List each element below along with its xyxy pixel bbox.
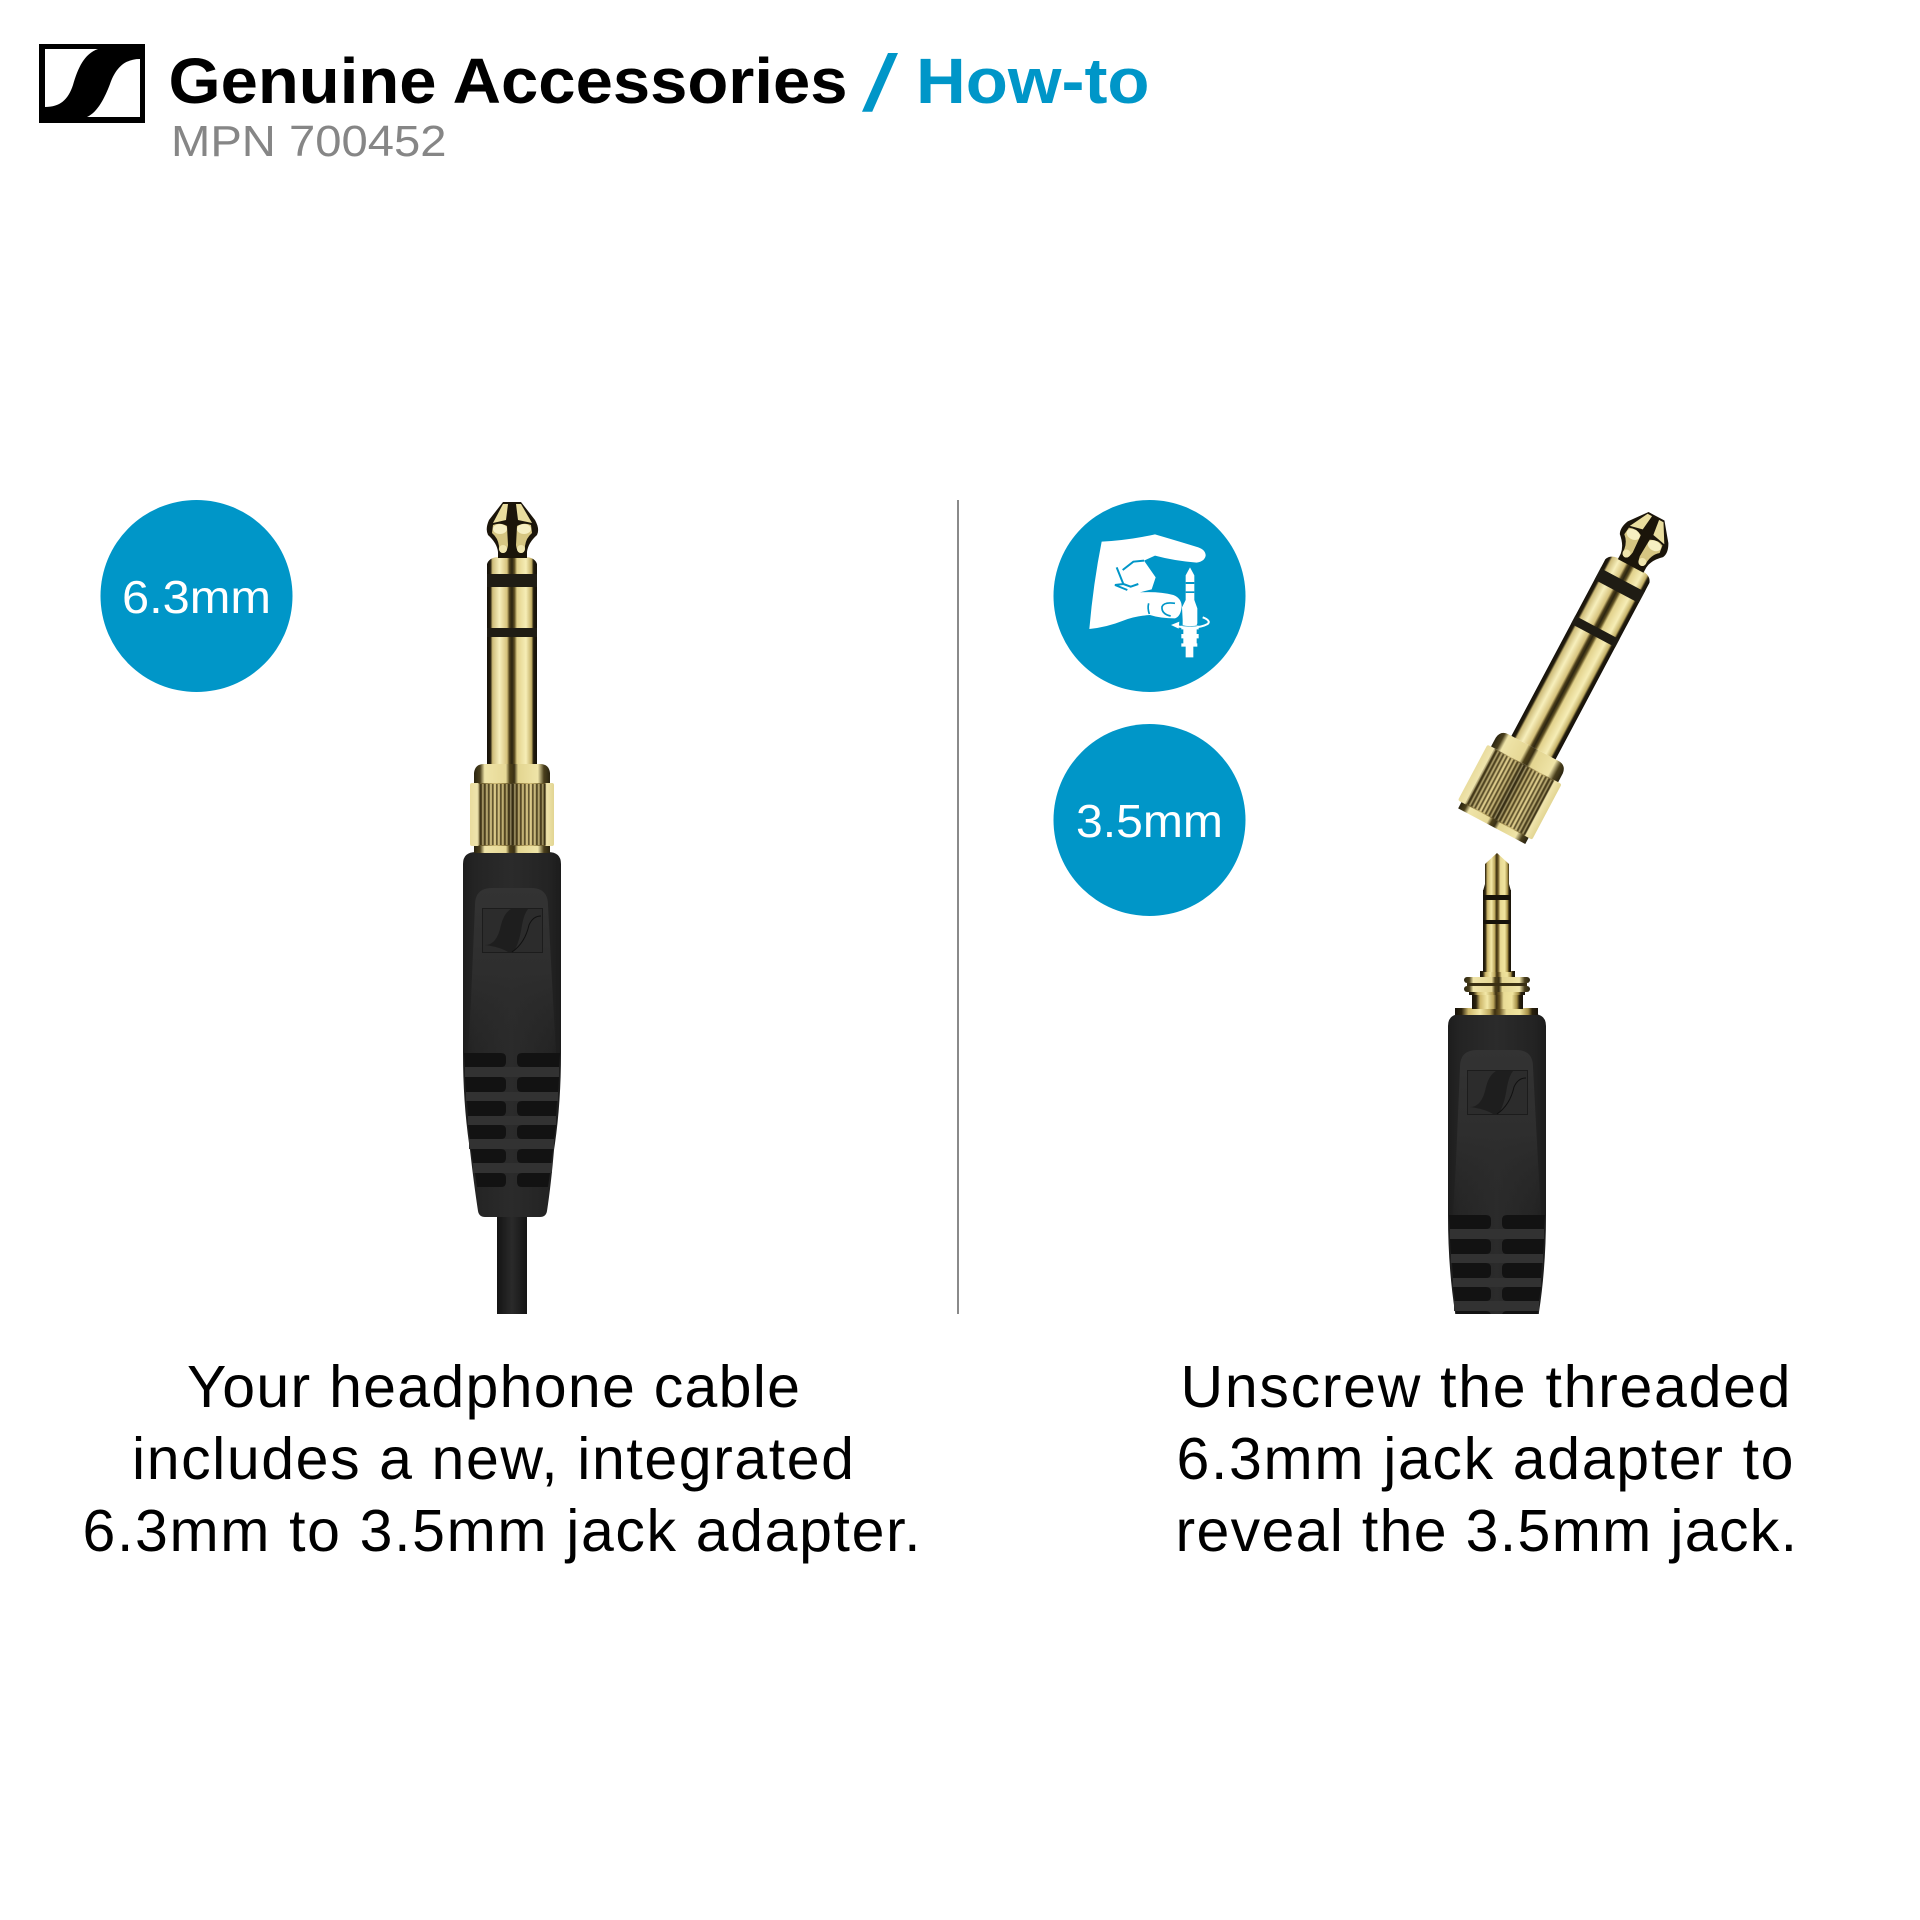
photo: 6.3mm jack on cable (463, 502, 561, 1314)
badge: 6.3mm (100, 500, 292, 692)
logo: Sennheiser mark (39, 44, 145, 123)
photo: removed 6.3mm adapter (1455, 497, 1694, 846)
title: How-to (916, 45, 1150, 117)
badge: 3.5mm (1054, 724, 1246, 916)
caption: right: reveal the 3.5mm jack. (1176, 1498, 1797, 1564)
badge: 3.5mm: 3.5mm (1076, 795, 1223, 847)
badge: 6.3mm: 6.3mm (122, 571, 271, 623)
caption: right: Unscrew the threaded (1180, 1354, 1790, 1420)
caption: left: includes a new, integrated (132, 1426, 854, 1492)
caption: right (1176, 1354, 1797, 1564)
caption: left: 6.3mm to 3.5mm jack adapter. (82, 1498, 920, 1564)
caption: left (82, 1354, 920, 1564)
part number: MPN 700452 (171, 117, 446, 166)
caption: right: 6.3mm jack adapter to (1176, 1426, 1794, 1492)
badge: unscrew icon (1054, 500, 1246, 692)
title: / (862, 39, 899, 128)
caption: left: Your headphone cable (187, 1354, 800, 1420)
title (168, 39, 1150, 128)
photo: exposed 3.5mm jack (1448, 853, 1546, 1314)
title: Genuine Accessories (168, 45, 848, 117)
